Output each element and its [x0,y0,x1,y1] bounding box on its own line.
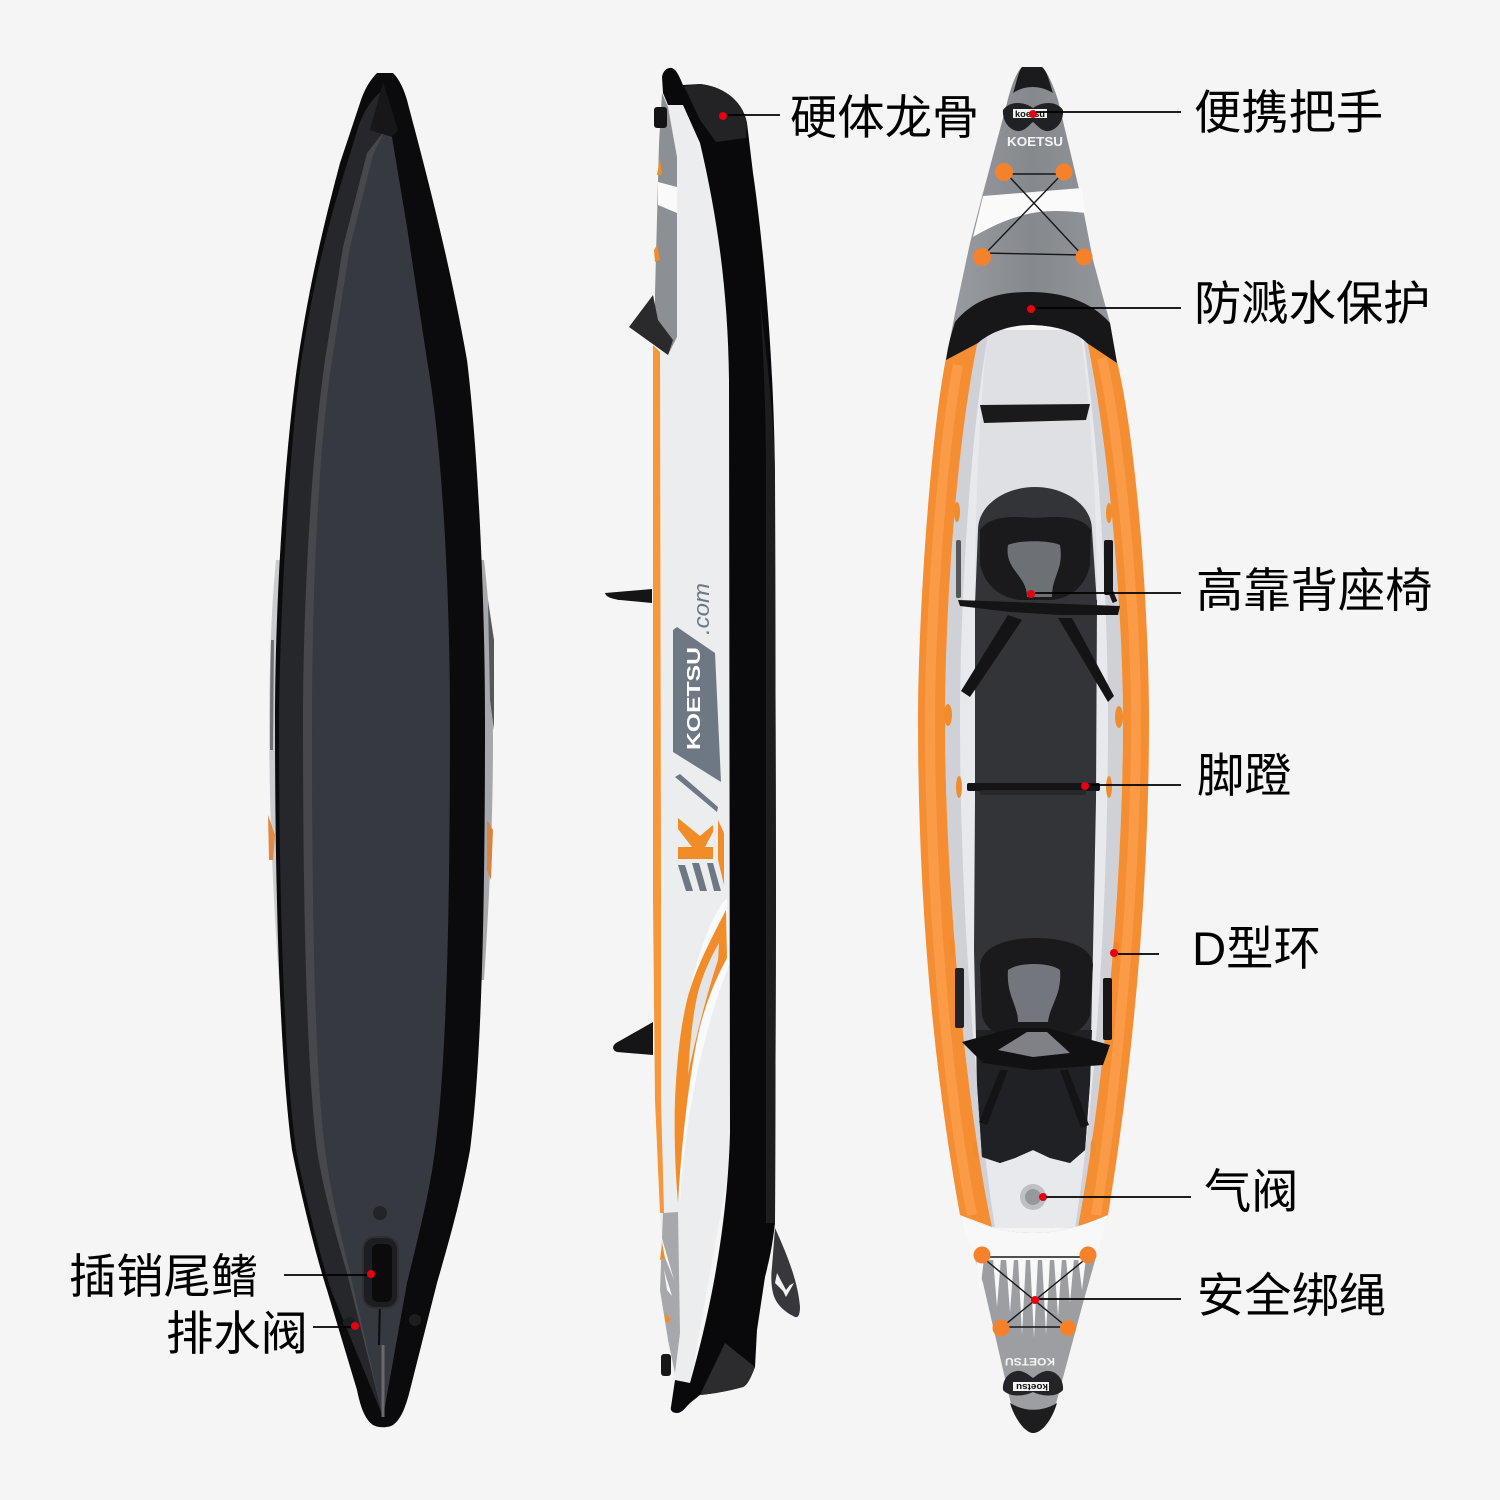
swoosh halo [676,898,729,1203]
slash [675,774,718,812]
bow orange marks [654,158,662,262]
D-ring [1110,941,1119,959]
stern tip [1010,1403,1057,1433]
side straps [955,540,1115,1040]
bow deck [946,67,1117,363]
keel shaded strip [303,130,385,1417]
bow cap [370,82,398,137]
label: carry handle: 便携把手 [1194,87,1383,140]
inner floor [960,335,1108,1228]
label: drain valve: 排水阀 [166,1308,308,1361]
skeg fin [771,1228,800,1317]
stern white band [960,1215,1108,1260]
label: pin fin: 插销尾鳍 [69,1251,258,1304]
kayak: top view [918,67,1149,1433]
stern white marks [661,1235,674,1296]
swoosh cutout [688,943,719,1075]
floor handle strap [980,404,1090,423]
bow grey panel [655,93,677,355]
white bow band [973,188,1085,237]
footrest strap [967,782,1100,795]
stern cap [700,1343,755,1395]
stern clip [661,1354,671,1376]
logo K [678,818,724,891]
right valve [409,1314,421,1326]
splash guard fin [629,295,673,355]
label: splash guard: 防溅水保护 [1194,278,1430,331]
bow tie-down ropes [973,163,1092,266]
side D-rings [944,502,1123,1158]
bow tip [1013,67,1053,93]
pin fin mount [363,1237,398,1308]
label: hard keel: 硬体龙骨 [790,92,979,145]
air valve [1020,1184,1047,1210]
hard keel cap [684,84,747,142]
label: high-back seat: 高靠背座椅 [1196,565,1432,618]
stern handle: koetsu [1016,1382,1048,1392]
hull outline [275,73,485,1427]
stern tip [382,1345,384,1417]
bow handle [1003,103,1063,131]
fin plug [373,1206,387,1220]
rear strap [613,1022,653,1055]
stern spikes [976,1258,1086,1338]
hull panel [312,130,450,1417]
tube highlight [760,300,776,1223]
orange swoosh [675,910,727,1203]
stern orange marks [660,1243,671,1323]
white body [660,105,735,1385]
stern tie-down ropes [974,1246,1096,1336]
label: safety rope: 安全绑绳 [1197,1270,1386,1323]
hard keel marker [719,112,727,120]
splash guard [946,292,1117,363]
front seat [958,487,1120,702]
bow white band [658,182,677,213]
label: footrest: 脚蹬 [1197,750,1292,803]
orange left tube [918,340,992,1227]
kayak: bottom view [268,73,494,1427]
brand panel: KOETSU [684,647,704,750]
footrest strap [605,589,652,603]
orange stripe [653,345,664,1213]
drain valve [343,1317,359,1330]
bow handle: koetsu [1015,109,1045,119]
front floor panel [975,330,1097,600]
black floor mat [974,600,1097,1163]
orange right tube [1078,340,1149,1227]
black tube [662,68,776,1413]
brand panel [673,583,721,782]
stern brand: KOETSU [1005,1355,1055,1367]
stern grey panel [660,1212,680,1373]
label: air valve: 气阀 [1204,1166,1299,1219]
left shaded band [279,90,383,1417]
brand panel: .com [689,583,714,635]
bow handle [654,107,667,128]
rear seat [962,938,1110,1128]
kayak: side view [605,68,800,1413]
label: D-ring: D型环 [1192,923,1321,976]
stern deck [960,1215,1108,1433]
bow brand: KOETSU [1007,135,1063,149]
lower mat [976,1030,1092,1163]
side slivers [268,560,494,980]
stern handle [1003,1371,1063,1396]
stern keel line [379,1250,381,1345]
cockpit floor [945,335,1123,1227]
